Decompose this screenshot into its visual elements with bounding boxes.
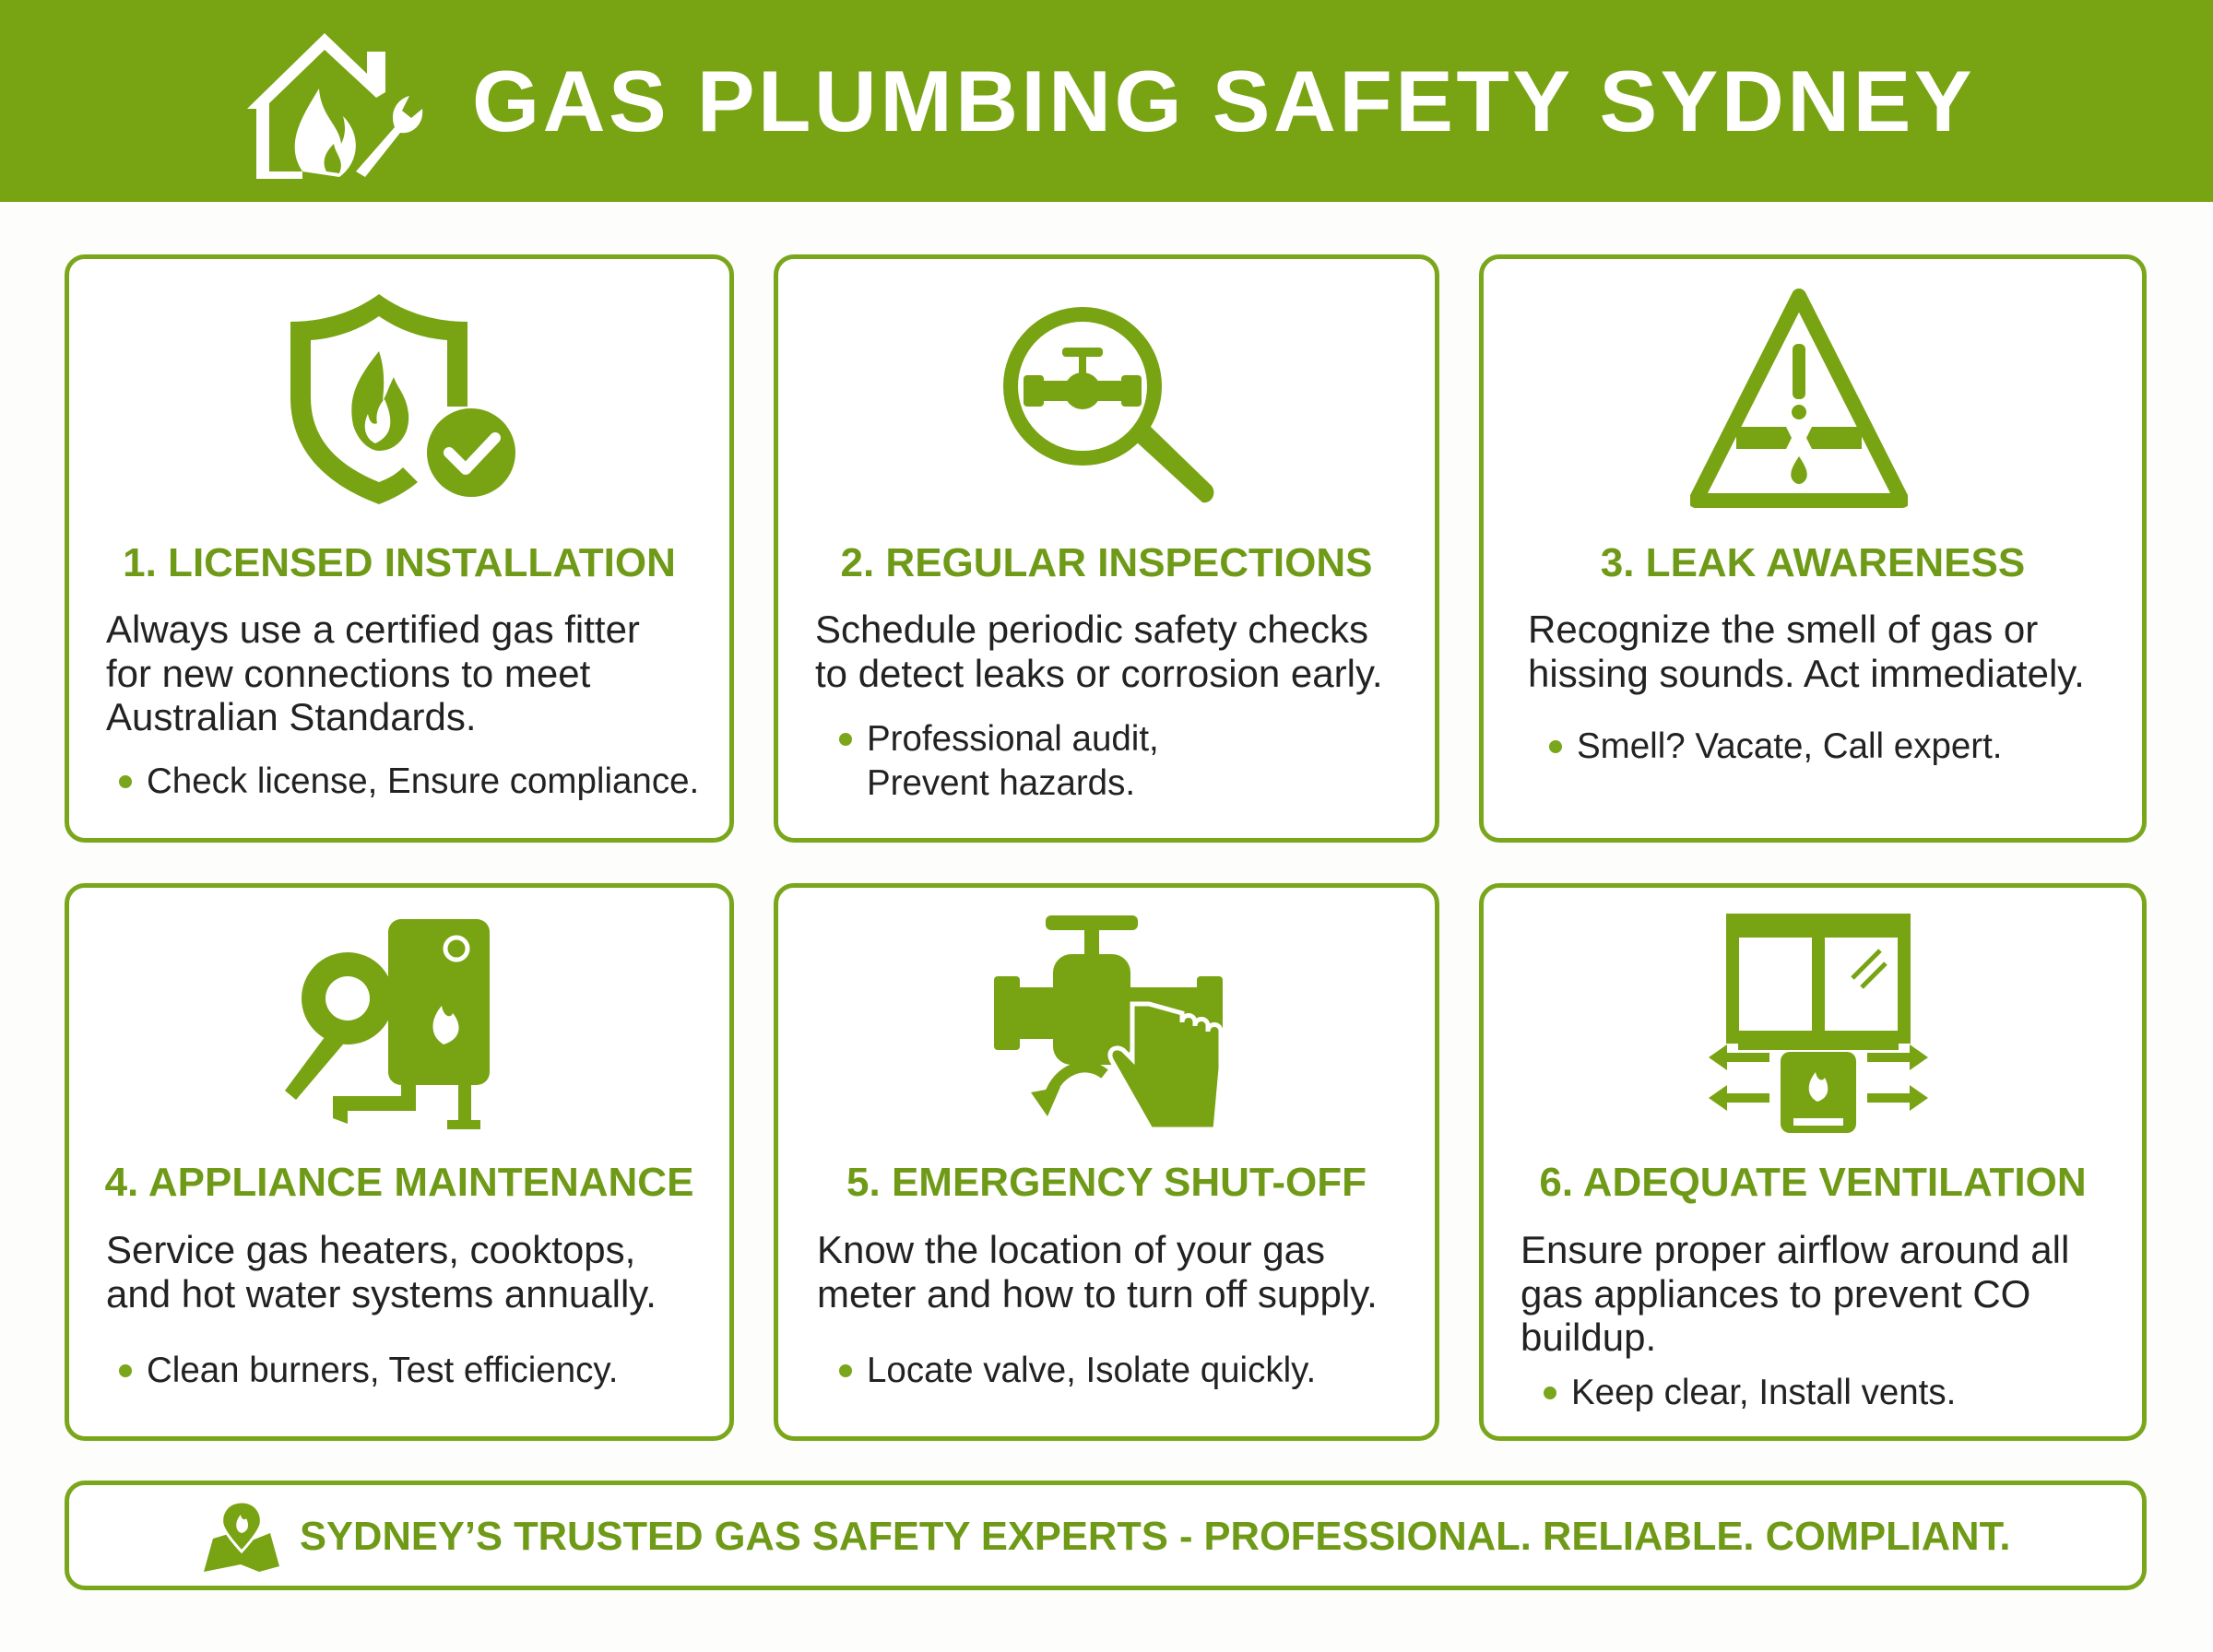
header band bbox=[0, 0, 2213, 202]
heading: 6. ADEQUATE VENTILATION bbox=[1539, 1160, 2087, 1205]
body text: gas appliances to prevent CO bbox=[1521, 1272, 2030, 1315]
body text bbox=[817, 1228, 1378, 1315]
icon: shield with flame and check bbox=[290, 294, 515, 504]
bullet: Professional audit, bbox=[867, 719, 1159, 759]
icon: warning triangle with leaking pipe bbox=[1690, 289, 1908, 508]
body text: Know the location of your gas bbox=[817, 1228, 1325, 1271]
body text: and hot water systems annually. bbox=[106, 1272, 657, 1315]
body text: buildup. bbox=[1521, 1316, 1656, 1359]
panel: leak awareness bbox=[1479, 254, 2147, 843]
body text bbox=[1521, 1228, 2069, 1359]
body text: meter and how to turn off supply. bbox=[817, 1272, 1378, 1315]
body text bbox=[1528, 608, 2085, 695]
title: GAS PLUMBING SAFETY SYDNEY bbox=[472, 53, 1975, 149]
bullet: Locate valve, Isolate quickly. bbox=[867, 1351, 1316, 1390]
body text bbox=[815, 608, 1383, 695]
heading: 2. REGULAR INSPECTIONS bbox=[841, 540, 1372, 585]
bullet: Smell? Vacate, Call expert. bbox=[1577, 726, 2003, 766]
bullet bbox=[867, 717, 1159, 806]
panel: adequate ventilation bbox=[1479, 883, 2147, 1441]
panel: regular inspections bbox=[774, 254, 1439, 843]
icon: magnifier over valve bbox=[1003, 307, 1213, 503]
bullet: Keep clear, Install vents. bbox=[1571, 1373, 1956, 1412]
bullet: Check license, Ensure compliance. bbox=[147, 761, 699, 801]
icon: valve with hand bbox=[994, 915, 1223, 1127]
body text: Always use a certified gas fitter bbox=[106, 608, 640, 651]
icon: house with flame and wrench bbox=[247, 33, 422, 179]
heading: 5. EMERGENCY SHUT-OFF bbox=[846, 1160, 1367, 1205]
body text: Service gas heaters, cooktops, bbox=[106, 1228, 635, 1271]
bullet: Clean burners, Test efficiency. bbox=[147, 1351, 618, 1390]
panel: emergency shut-off bbox=[774, 883, 1439, 1441]
footer banner bbox=[65, 1481, 2147, 1590]
icon: gear wrench and water heater bbox=[285, 919, 490, 1129]
panel: appliance maintenance bbox=[65, 883, 734, 1441]
body text: to detect leaks or corrosion early. bbox=[815, 651, 1383, 695]
heading: 1. LICENSED INSTALLATION bbox=[123, 540, 676, 585]
body text bbox=[106, 1228, 657, 1315]
panel: licensed installation bbox=[65, 254, 734, 843]
icon: map pin with flame bbox=[204, 1503, 279, 1572]
body text: Schedule periodic safety checks bbox=[815, 608, 1368, 651]
heading: 4. APPLIANCE MAINTENANCE bbox=[105, 1160, 693, 1205]
body text bbox=[106, 608, 640, 738]
bullet: Prevent hazards. bbox=[867, 763, 1135, 803]
icon: window, appliance and airflow arrows bbox=[1709, 914, 1928, 1133]
body text: hissing sounds. Act immediately. bbox=[1528, 651, 2085, 695]
body text: Australian Standards. bbox=[106, 695, 477, 738]
heading: 3. LEAK AWARENESS bbox=[1601, 540, 2025, 585]
tagline: SYDNEY’S TRUSTED GAS SAFETY EXPERTS - PROFESSIONAL. RELIABLE. COMPLIANT. bbox=[300, 1515, 2010, 1559]
body text: for new connections to meet bbox=[106, 651, 590, 695]
body text: Recognize the smell of gas or bbox=[1528, 608, 2038, 651]
body text: Ensure proper airflow around all bbox=[1521, 1228, 2069, 1271]
